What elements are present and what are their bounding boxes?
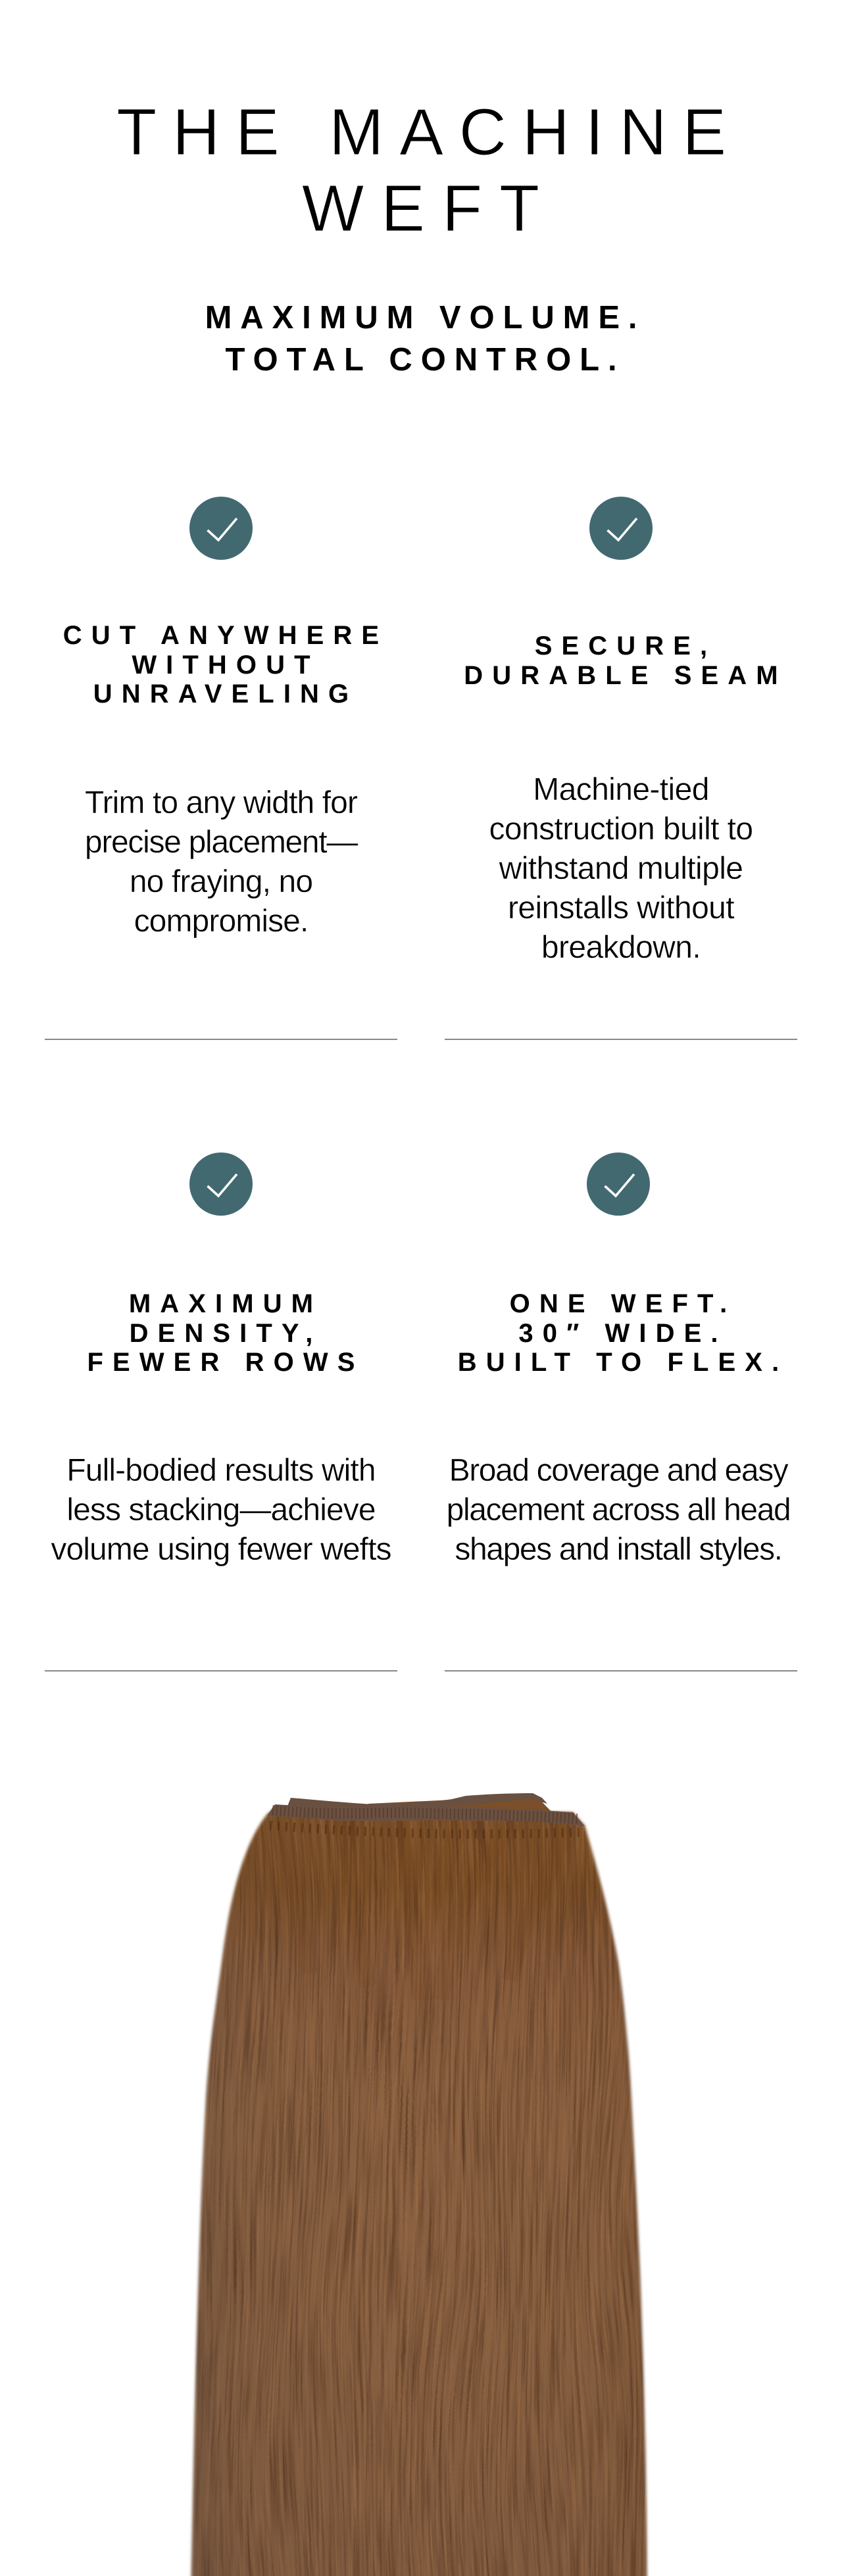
text block: Machine-tied: [533, 772, 709, 807]
text block: breakdown.: [541, 930, 701, 965]
heading: WITHOUT: [132, 650, 320, 679]
title: WEFT: [302, 172, 557, 245]
text block: withstand multiple: [499, 851, 743, 886]
text block: Full-bodied results with: [66, 1453, 376, 1488]
text block: construction built to: [489, 812, 753, 847]
hair body: [189, 1806, 650, 2576]
text block: [85, 785, 358, 939]
front seam: [267, 1804, 585, 1826]
text block: no fraying, no: [130, 864, 312, 899]
heading: [63, 621, 388, 708]
text block: Trim to any width for: [85, 785, 357, 820]
heading: BUILT TO FLEX.: [458, 1348, 788, 1377]
text block: [447, 1453, 790, 1567]
divider: [445, 1039, 797, 1040]
divider: [445, 1670, 797, 1672]
text block: shapes and install styles.: [455, 1532, 782, 1567]
heading: ONE WEFT.: [510, 1289, 736, 1318]
text block: placement across all head: [447, 1493, 790, 1527]
heading: [464, 632, 787, 689]
text block: precise placement—: [85, 825, 357, 860]
heading: SECURE,: [535, 632, 716, 660]
panel: maximum density: [45, 1152, 397, 1672]
text block: [51, 1453, 391, 1567]
text block: volume using fewer wefts: [51, 1532, 391, 1567]
heading: [458, 1289, 788, 1377]
heading: MAXIMUM: [129, 1289, 322, 1318]
heading: DURABLE SEAM: [464, 660, 787, 689]
subtitle: TOTAL CONTROL.: [226, 342, 625, 378]
heading: UNRAVELING: [93, 680, 358, 708]
title: [116, 95, 742, 245]
icon: check circle: [189, 497, 253, 560]
icon: check circle: [589, 497, 653, 560]
text block: less stacking—achieve: [66, 1493, 376, 1527]
text block: reinstalls without: [508, 891, 734, 926]
subtitle: [205, 300, 645, 378]
icon: check circle: [587, 1152, 650, 1216]
panel: secure seam: [445, 497, 797, 1040]
divider: [45, 1670, 397, 1672]
heading: CUT ANYWHERE: [63, 621, 388, 650]
illustration: hair weft: [189, 1793, 650, 2576]
text block: compromise.: [134, 904, 308, 939]
heading: FEWER ROWS: [87, 1348, 364, 1377]
heading: 30″ WIDE.: [518, 1318, 728, 1347]
text block: [489, 772, 753, 965]
title: THE MACHINE: [116, 95, 742, 169]
icon: check circle: [189, 1152, 253, 1216]
divider: [45, 1039, 397, 1040]
panel: one weft: [445, 1152, 797, 1672]
text block: Broad coverage and easy: [449, 1453, 787, 1488]
subtitle: MAXIMUM VOLUME.: [205, 300, 645, 335]
heading: [87, 1289, 364, 1377]
heading: DENSITY,: [130, 1318, 322, 1347]
panel: cut anywhere: [45, 497, 397, 1040]
back weft: [287, 1793, 554, 1816]
